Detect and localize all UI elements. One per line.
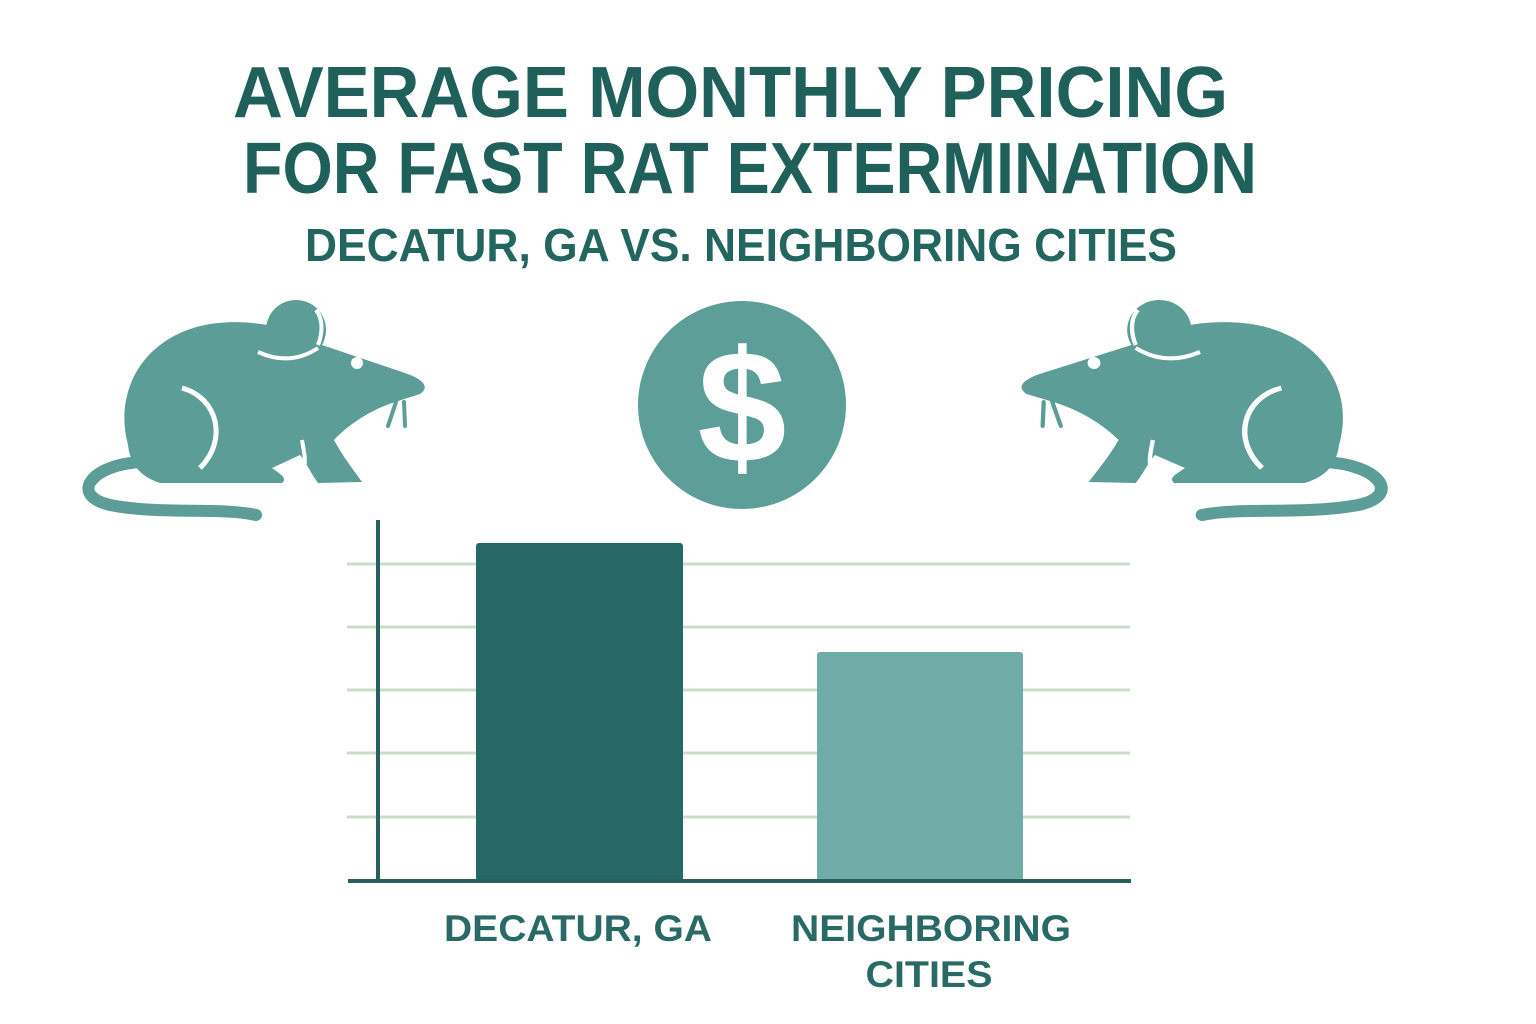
label: neighboring cities: CITIES [866,954,992,995]
bar chart [347,520,1131,883]
icon: dollar coin: $ [698,317,786,496]
bar: neighboring cities [817,652,1023,881]
label: neighboring cities [791,908,1071,995]
label: neighboring cities: NEIGHBORING [791,908,1071,949]
icon: dollar coin [638,301,846,509]
subtitle: DECATUR, GA VS. NEIGHBORING CITIES [305,219,1177,271]
label: Decatur: DECATUR, GA [444,908,712,949]
title: AVERAGE MONTHLY PRICING [233,53,1228,133]
bar: Decatur [476,543,683,881]
icon: left rat [88,300,425,515]
title: FOR FAST RAT EXTERMINATION [243,129,1257,209]
icon: right rat [1022,300,1381,515]
title [233,53,1257,209]
